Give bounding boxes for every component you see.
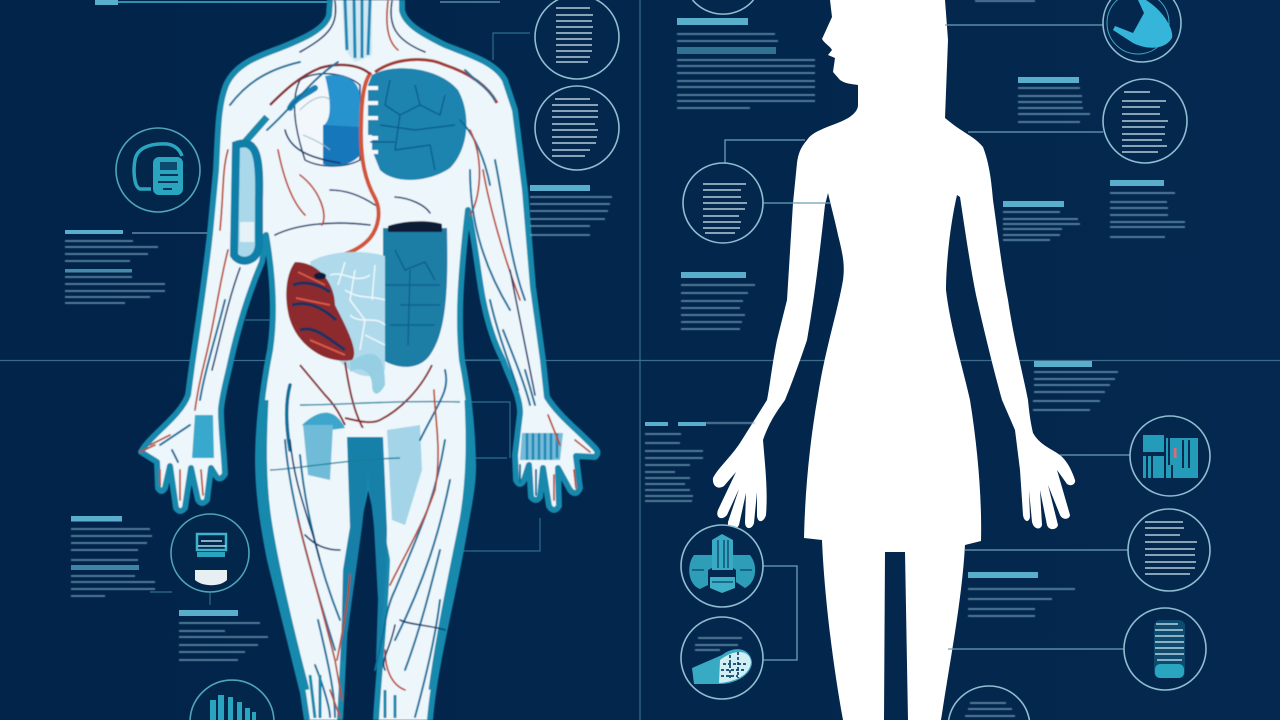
circle: top-right text callout 1 bbox=[535, 0, 619, 79]
right palm bbox=[520, 370, 590, 500]
pelvic vessels bbox=[287, 354, 432, 450]
circle: top-right text callout 2 bbox=[535, 86, 619, 170]
connector lines: left panel bbox=[132, 2, 540, 605]
circle: left text callout bbox=[683, 163, 763, 243]
text block: top right faint lines bbox=[975, 0, 1035, 2]
stomach bbox=[383, 221, 447, 367]
circle: right text callout 2 bbox=[1128, 509, 1210, 591]
circle: bottom text callout bbox=[949, 686, 1029, 720]
left arm tube bbox=[220, 117, 267, 261]
text block: right 4 bbox=[1033, 361, 1118, 410]
major vessels chest and shoulders bbox=[230, 60, 525, 310]
text block: lower left of right panel bbox=[645, 422, 755, 501]
left lung bbox=[290, 74, 360, 166]
circle: liver-like anatomy icon bbox=[681, 617, 763, 699]
heart bbox=[286, 262, 354, 361]
text block: lower left bbox=[71, 516, 155, 596]
text block: middle left of right panel bbox=[681, 272, 755, 329]
text block: upper right panel bbox=[677, 18, 815, 108]
arm vessels bbox=[195, 250, 535, 410]
circle: bar chart icon bbox=[190, 680, 274, 720]
circle: top-right organ icon bbox=[1103, 0, 1181, 62]
text block: left middle bbox=[65, 230, 165, 303]
circle: right text callout bbox=[1103, 79, 1187, 163]
text block: lower right bbox=[968, 572, 1075, 616]
text block: right 2 bbox=[1110, 180, 1185, 237]
circle: bottle icon bbox=[171, 514, 249, 592]
body skin fill bbox=[141, 0, 598, 720]
text block: center-left column bbox=[530, 185, 612, 235]
circle: top partial bbox=[692, 0, 754, 14]
text block: upper right bbox=[1018, 77, 1090, 122]
thigh vessels bbox=[270, 370, 460, 718]
anatomical male figure bbox=[140, 0, 598, 720]
text block: bottom left bbox=[179, 610, 268, 660]
left palm bbox=[140, 415, 214, 500]
circle: tablet icon bbox=[1124, 608, 1206, 690]
aorta bbox=[335, 74, 379, 258]
connector lines: right panel bbox=[725, 25, 1130, 660]
text block: top left chip bbox=[95, 0, 118, 5]
right lung bbox=[367, 68, 466, 180]
hip and inner leg bands bbox=[263, 400, 469, 690]
text block: right 3 bbox=[1003, 201, 1080, 240]
circle: data panel icon bbox=[1130, 416, 1210, 496]
circle: kidney-like anatomy icon bbox=[681, 525, 763, 607]
circle: headset and device icon bbox=[116, 128, 200, 212]
body outline bbox=[141, 0, 598, 720]
neck vessels bbox=[300, 0, 425, 62]
female white silhouette bbox=[713, 0, 1075, 720]
intestines bbox=[310, 252, 385, 376]
